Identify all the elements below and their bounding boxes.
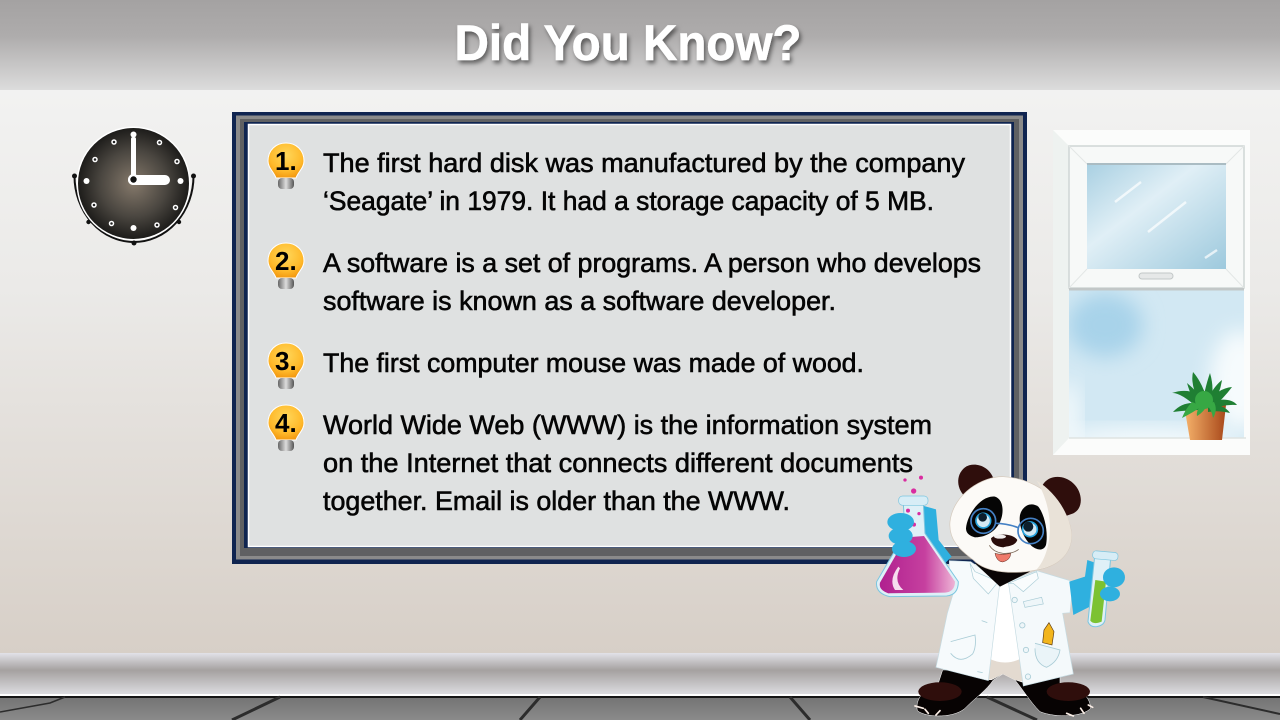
glasses bbox=[971, 509, 1043, 544]
fact 2 text: software is known as a software developer. bbox=[323, 286, 836, 316]
icon: bulb 3: 3. bbox=[275, 346, 297, 376]
eye patches bbox=[966, 497, 1047, 549]
panel: facts board bbox=[232, 112, 1027, 564]
head bbox=[950, 477, 1072, 572]
left hand and flask bbox=[876, 476, 958, 597]
lab coat bbox=[936, 561, 1073, 686]
icon: wall clock bbox=[72, 126, 196, 246]
wall background bbox=[0, 90, 1280, 654]
header band bbox=[0, 0, 1280, 90]
belly bbox=[987, 583, 1025, 683]
icon: bulb 2 bbox=[268, 243, 304, 289]
fact 1 text bbox=[323, 148, 965, 216]
fact 4 text: together. Email is older than the WWW. bbox=[323, 486, 790, 516]
fact 4 text bbox=[323, 410, 932, 516]
icon: bulb 1: 1. bbox=[275, 146, 297, 176]
fact 3 text: The first computer mouse was made of wood. bbox=[323, 348, 864, 378]
fact 4 text: World Wide Web (WWW) is the information system bbox=[323, 410, 932, 440]
fact 1 text: The first hard disk was manufactured by the company bbox=[323, 148, 965, 178]
fact 1 text: ‘Seagate’ in 1979. It had a storage capacity of 5 MB. bbox=[323, 186, 934, 216]
ears bbox=[958, 465, 1081, 517]
icon: bulb 3 bbox=[268, 343, 304, 389]
title: Did You Know? bbox=[454, 15, 802, 71]
icon: bulb 4: 4. bbox=[275, 408, 297, 438]
pencil bbox=[1043, 623, 1054, 645]
icon: bulb 4 bbox=[268, 405, 304, 451]
icon: potted plant bbox=[1172, 372, 1237, 440]
nose and mouth bbox=[989, 534, 1019, 562]
fact 4 text: on the Internet that connects different documents bbox=[323, 448, 913, 478]
floor bbox=[0, 696, 1280, 720]
legs and feet bbox=[915, 670, 1093, 716]
window bbox=[1053, 130, 1250, 455]
icon: bulb 1 bbox=[268, 143, 304, 189]
neck bbox=[975, 563, 1030, 587]
baseboard bbox=[0, 653, 1280, 696]
panda scientist bbox=[876, 465, 1125, 716]
right hand and test tube bbox=[1069, 551, 1125, 627]
fact 2 text bbox=[323, 248, 981, 316]
icon: bulb 2: 2. bbox=[275, 246, 297, 276]
fact 2 text: A software is a set of programs. A person who develops bbox=[323, 248, 981, 278]
